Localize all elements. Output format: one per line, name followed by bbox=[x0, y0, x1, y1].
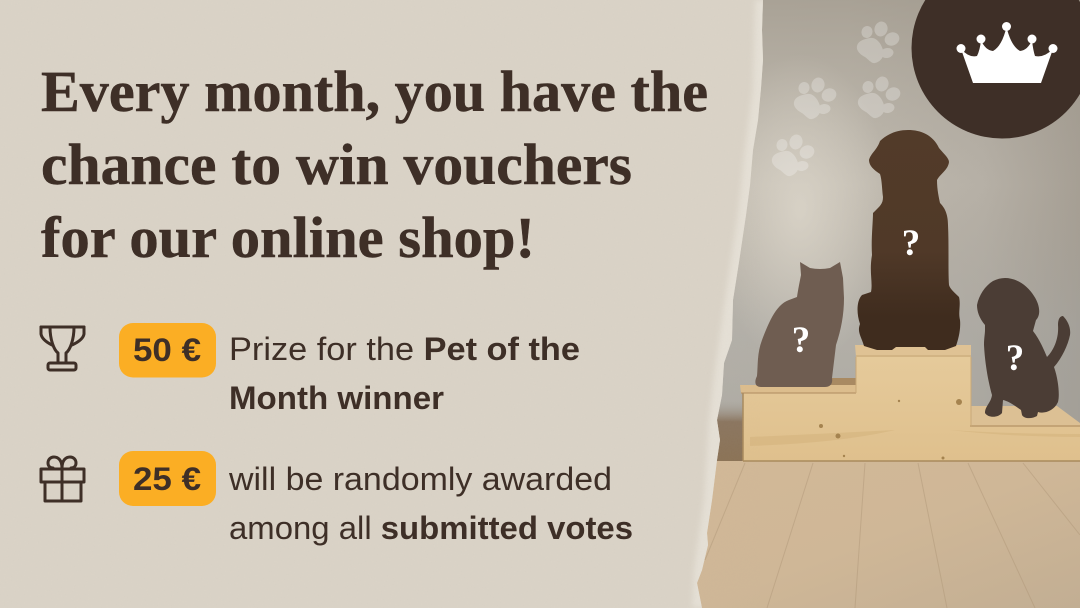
crown badge bbox=[912, 0, 1080, 138]
paw prints bbox=[772, 20, 903, 176]
icon: gift bbox=[41, 457, 84, 501]
title: for our online shop! bbox=[41, 205, 535, 270]
icon: trophy bbox=[41, 327, 84, 370]
text: voucher description: will be randomly awarded bbox=[228, 461, 612, 497]
floor bbox=[690, 461, 1080, 608]
prize row: random voucher bbox=[41, 451, 633, 546]
prize row: pet of the month bbox=[41, 323, 580, 416]
question mark: small dog: ? bbox=[1006, 338, 1024, 379]
silhouette: big dog bbox=[858, 130, 960, 350]
question mark: big dog: ? bbox=[902, 223, 920, 264]
text: prize description bbox=[229, 331, 580, 416]
question mark: cat: ? bbox=[792, 320, 810, 361]
text: prize description: Prize for the Pet of the bbox=[229, 331, 580, 367]
icon: crown bbox=[956, 22, 1058, 83]
title: Every month, you have the bbox=[41, 59, 708, 124]
silhouette: small dog bbox=[977, 278, 1070, 418]
title bbox=[41, 59, 708, 270]
text: voucher description: among all submitted votes bbox=[229, 510, 633, 546]
silhouette: cat bbox=[755, 262, 844, 387]
title: chance to win vouchers bbox=[41, 132, 632, 197]
photo panel: podium scene bbox=[690, 0, 1080, 608]
badge: 25 euro bbox=[119, 451, 216, 506]
wooden podium bbox=[740, 345, 1080, 461]
wall bbox=[690, 0, 1080, 462]
badge: 50 euro bbox=[119, 323, 216, 378]
badge: 25 euro: 25 € bbox=[133, 461, 201, 497]
text: voucher description bbox=[228, 461, 633, 546]
paper background bbox=[690, 0, 763, 608]
text: prize description: Month winner bbox=[229, 380, 444, 416]
badge: 50 euro: 50 € bbox=[133, 332, 201, 368]
